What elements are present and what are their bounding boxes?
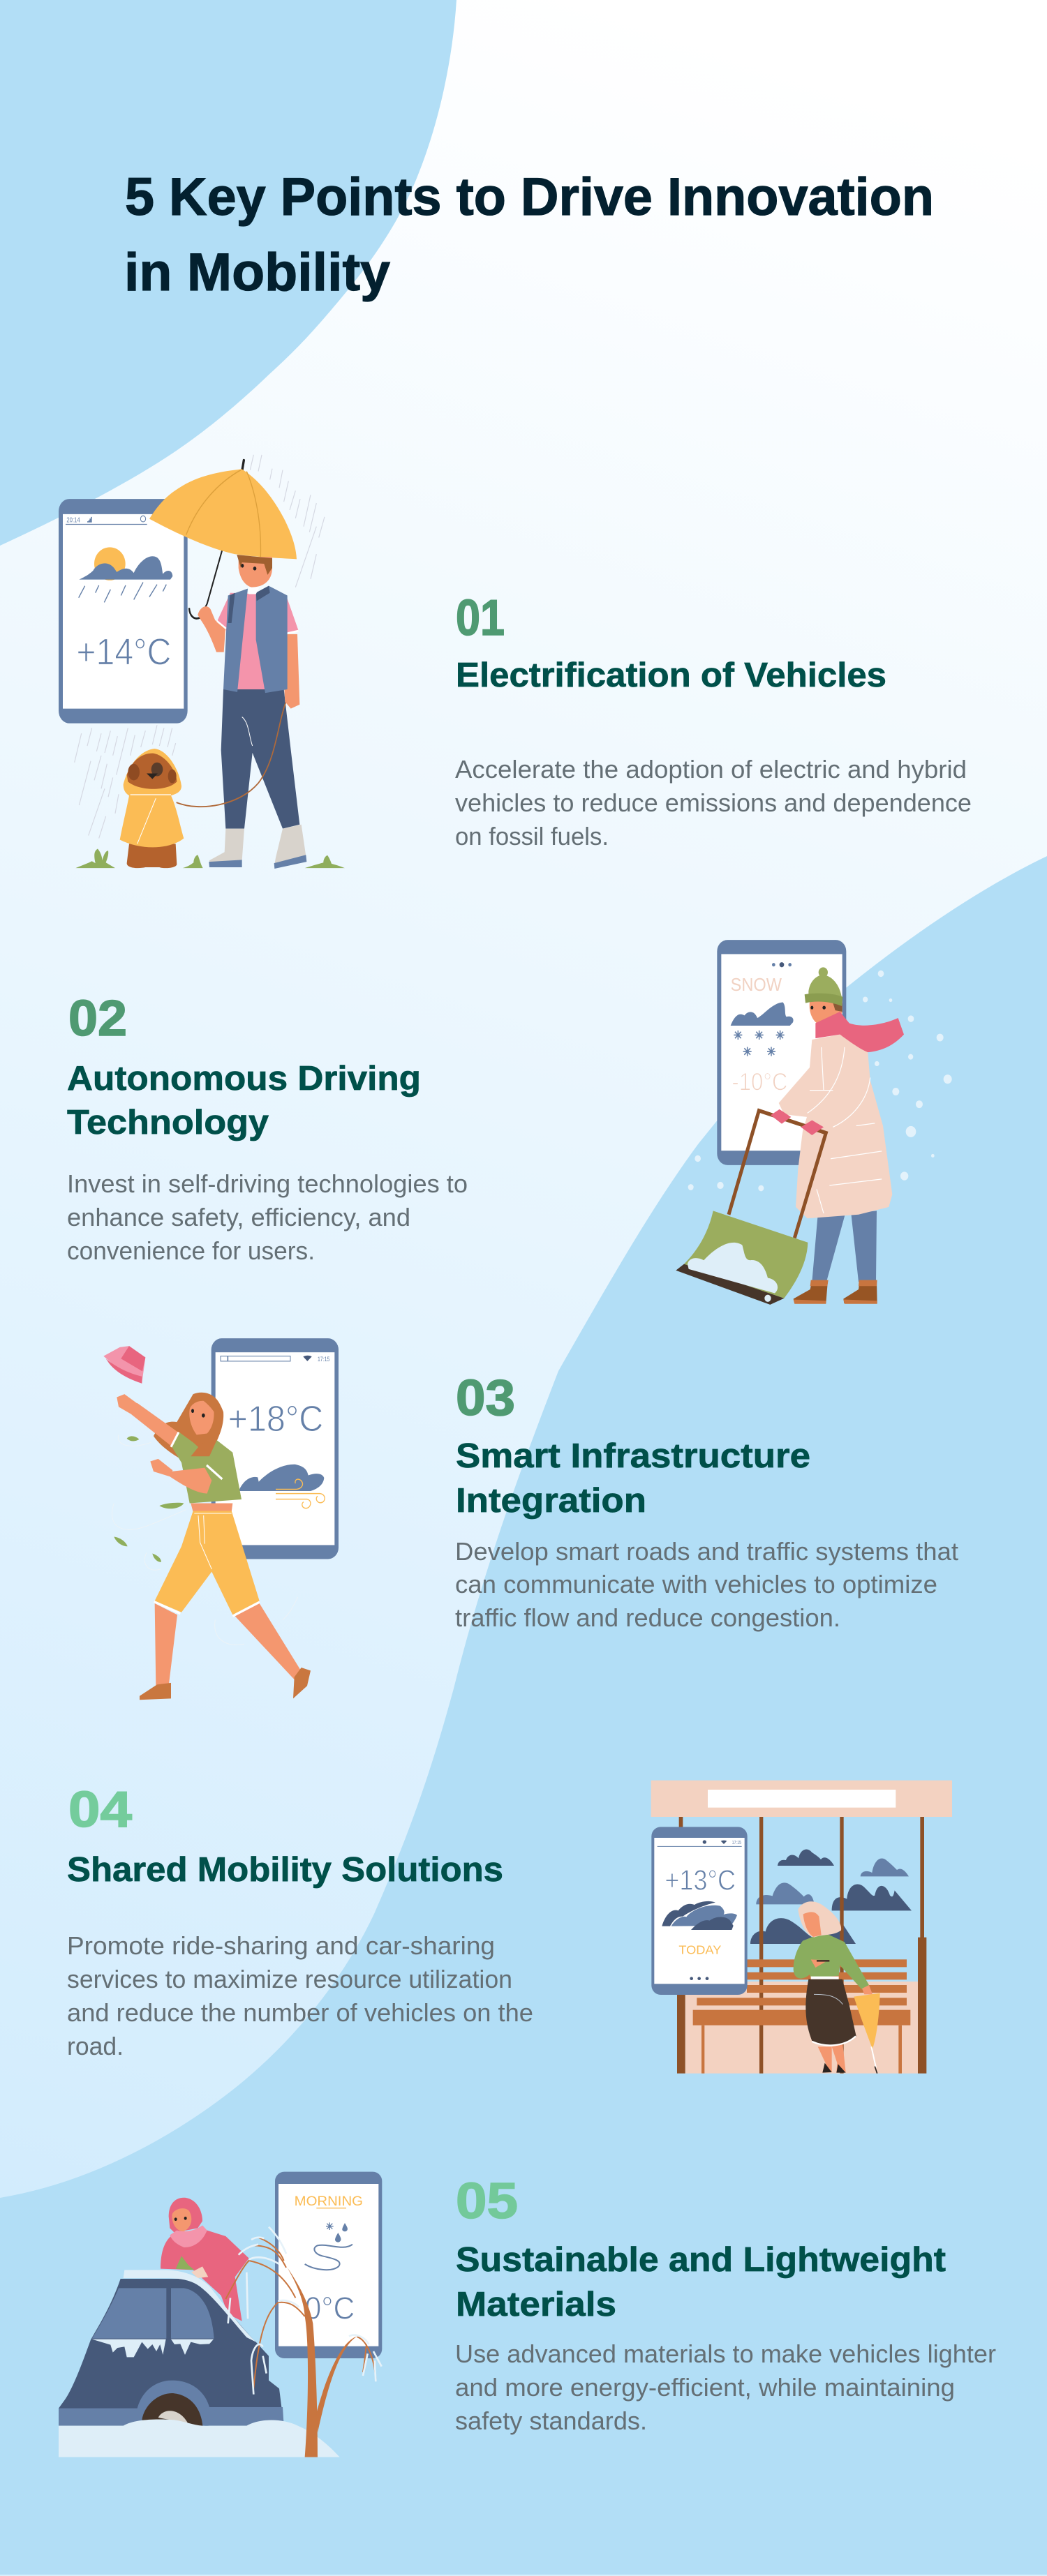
section 03 text: Develop smart roads and traffic systems that bbox=[455, 1537, 958, 1566]
snowy car bbox=[59, 2270, 284, 2433]
phone with weather: 20:14 bbox=[66, 516, 80, 525]
section 04 text: road. bbox=[67, 2032, 124, 2060]
phone with forecast bbox=[651, 1827, 748, 1995]
phone with morning forecast: MORNING bbox=[295, 2194, 363, 2209]
title bbox=[124, 167, 934, 302]
closed yellow umbrella bbox=[854, 1993, 880, 2074]
illustration 3: woman losing hat in wind with phone bbox=[103, 1338, 339, 1700]
section 04 text: services to maximize resource utilization bbox=[67, 1965, 512, 1993]
phone with temperature bbox=[211, 1338, 339, 1559]
section 02 text: Autonomous Driving bbox=[67, 1060, 421, 1098]
section 05 text: safety standards. bbox=[455, 2406, 647, 2435]
top-left blue blob bbox=[0, 0, 456, 546]
section 02 text: convenience for users. bbox=[67, 1236, 315, 1265]
wind leaves bbox=[114, 1436, 184, 1562]
phone with weather bbox=[59, 499, 188, 724]
section 04 text: Promote ride-sharing and car-sharing bbox=[67, 1931, 495, 1960]
phone with temperature: +18°C bbox=[228, 1398, 323, 1439]
woman with phone bbox=[794, 1901, 872, 2073]
woman in pink coat bbox=[161, 2198, 249, 2321]
rain streaks bbox=[75, 455, 325, 838]
grass tufts bbox=[75, 849, 345, 868]
section 05 text: and more energy-efficient, while maintaining bbox=[455, 2373, 955, 2402]
shelter back panel bbox=[685, 1982, 918, 2074]
section 04 text bbox=[67, 1782, 533, 2060]
phone with forecast: +13°C bbox=[664, 1864, 736, 1896]
wind swirl lines bbox=[112, 1435, 298, 1645]
snow shovel bbox=[676, 1109, 826, 1305]
section 01 text: vehicles to reduce emissions and dependence bbox=[455, 788, 972, 817]
illustration 4: woman on bench at bus stop with phone bbox=[651, 1781, 952, 2074]
section 02 text: enhance safety, efficiency, and bbox=[67, 1203, 410, 1231]
section 04 text: 04 bbox=[68, 1782, 132, 1838]
title: in Mobility bbox=[124, 243, 390, 302]
section 05 text bbox=[455, 2173, 996, 2435]
phone with snow forecast: SNOW bbox=[731, 975, 782, 995]
section 03 text: can communicate with vehicles to optimize bbox=[455, 1570, 937, 1598]
illustration 5: woman clearing snowy car with phone and icy tree bbox=[59, 2172, 382, 2457]
section 03 text: Smart Infrastructure bbox=[456, 1437, 810, 1475]
phone with snow forecast bbox=[717, 940, 846, 1165]
phone with morning forecast bbox=[275, 2172, 382, 2358]
phone with temperature: 17:15 bbox=[318, 1356, 329, 1363]
title: 5 Key Points to Drive Innovation bbox=[125, 167, 934, 227]
woman bbox=[117, 1393, 311, 1700]
person legs and boots bbox=[794, 1211, 877, 1304]
section 05 text: Materials bbox=[456, 2286, 616, 2323]
section 01 text: Accelerate the adoption of electric and hybrid bbox=[455, 755, 967, 784]
illustration 1: man with umbrella, dog and phone bbox=[59, 455, 345, 869]
phone with forecast: TODAY bbox=[678, 1943, 722, 1957]
flying pink hat bbox=[103, 1346, 145, 1384]
person coat, head and scarf bbox=[779, 967, 904, 1218]
shelter roof and sign bbox=[651, 1781, 952, 1817]
phone with forecast: 17:15 bbox=[732, 1839, 741, 1845]
section 01 text: Electrification of Vehicles bbox=[456, 657, 886, 694]
bottom edge highlight bbox=[0, 2575, 1047, 2576]
section 01 text bbox=[455, 590, 972, 851]
phone with morning forecast: 0°C bbox=[305, 2290, 355, 2326]
clouds behind shelter bbox=[750, 1849, 912, 1944]
section 02 text: Invest in self-driving technologies to bbox=[67, 1169, 468, 1198]
icy tree bbox=[225, 2238, 376, 2457]
section 05 text: Use advanced materials to make vehicles lighter bbox=[455, 2339, 996, 2368]
snow drift bbox=[59, 2420, 340, 2457]
bench bbox=[693, 1959, 910, 2074]
section 01 text: 01 bbox=[456, 590, 505, 646]
man bbox=[177, 555, 306, 869]
section 03 text: traffic flow and reduce congestion. bbox=[455, 1603, 840, 1632]
section 03 text: Integration bbox=[456, 1482, 646, 1520]
section 02 text bbox=[67, 991, 468, 1265]
section 02 text: Technology bbox=[67, 1104, 269, 1141]
dog in raincoat bbox=[120, 749, 184, 868]
large blue wave bbox=[0, 856, 1047, 2576]
phone with snow forecast: -10°C bbox=[732, 1069, 787, 1096]
shelter posts bbox=[677, 1817, 926, 2074]
section 05 text: Sustainable and Lightweight bbox=[456, 2241, 946, 2279]
section 05 text: 05 bbox=[456, 2173, 518, 2229]
section 04 text: and reduce the number of vehicles on the bbox=[67, 1998, 533, 2027]
section 01 text: on fossil fuels. bbox=[455, 822, 609, 851]
phone with weather: +14°C bbox=[76, 631, 171, 673]
section 04 text: Shared Mobility Solutions bbox=[67, 1851, 503, 1889]
illustration 2: person shovelling snow with phone bbox=[676, 940, 952, 1305]
umbrella bbox=[149, 460, 297, 618]
section 03 text bbox=[455, 1370, 958, 1632]
ice on branches bbox=[228, 2227, 382, 2395]
falling snow dots bbox=[688, 971, 952, 1191]
section 03 text: 03 bbox=[456, 1370, 515, 1426]
section 02 text: 02 bbox=[68, 991, 127, 1047]
